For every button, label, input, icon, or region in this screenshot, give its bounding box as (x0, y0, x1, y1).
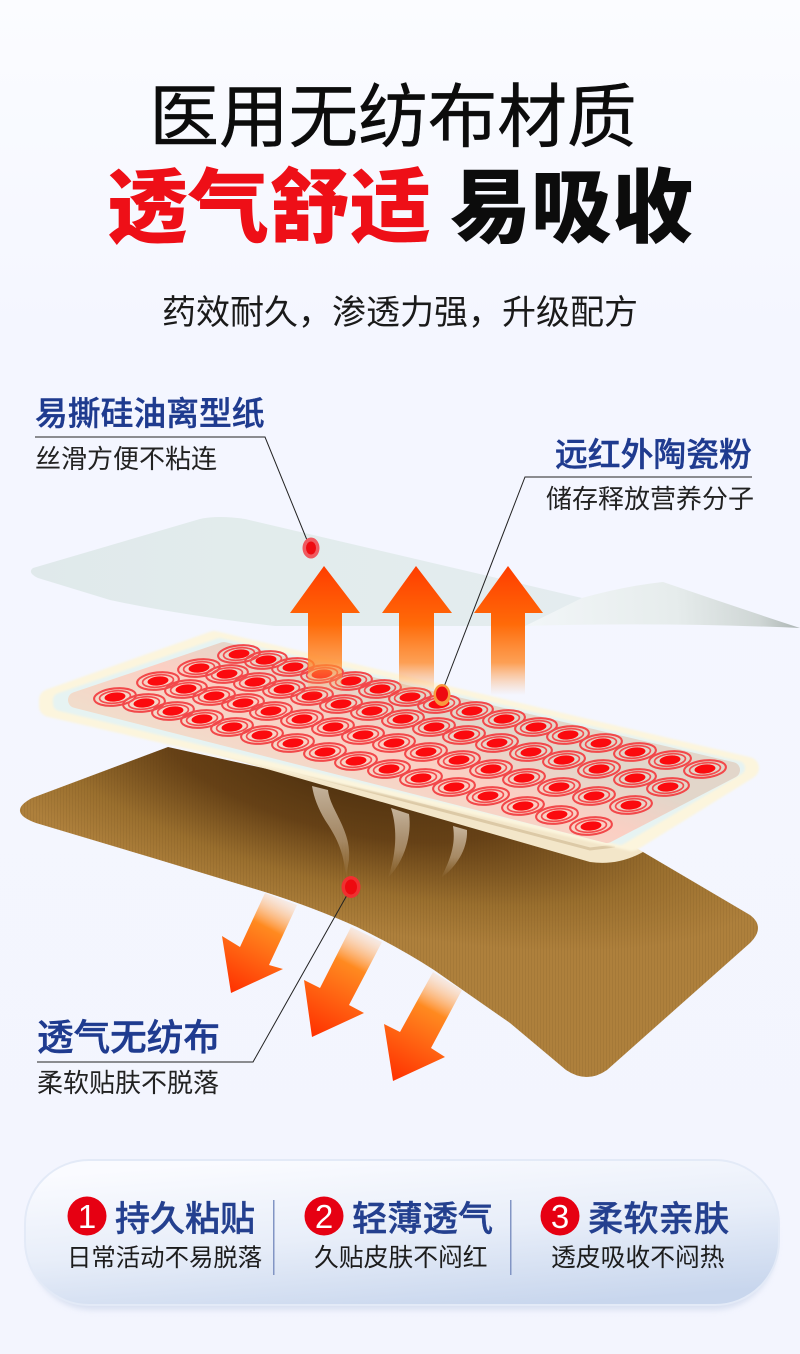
patch underside (170, 730, 643, 863)
benefit 2: 2 (315, 1198, 333, 1235)
callout: release paper (35, 395, 320, 558)
divider (510, 1200, 512, 1275)
callout: breathable non-woven: 柔软贴肤不脱落 (37, 1068, 219, 1098)
divider (273, 1200, 274, 1275)
benefit 3: 透皮吸收不闷热 (551, 1244, 725, 1272)
steam wisps (312, 786, 467, 878)
illustration: release paper sheet (31, 517, 800, 628)
subtitle: 药效耐久，渗透力强，升级配方 (162, 294, 638, 332)
headline: breathable and comfortable, easy absorption (107, 164, 693, 254)
panel: three benefits (25, 1160, 779, 1310)
far-infrared ceramic dots grid (93, 643, 727, 837)
headline: breathable and comfortable, easy absorption: 透气舒适 (107, 164, 431, 254)
headline: breathable and comfortable, easy absorption: 易吸收 (450, 164, 693, 254)
patch glow edge (50, 642, 748, 840)
middle patch layer (50, 642, 748, 863)
benefit 3: 3 (551, 1198, 569, 1235)
callout: release paper: 易撕硅油离型纸 (35, 395, 265, 432)
callout: breathable non-woven: 透气无纺布 (37, 1017, 220, 1058)
arrows: downward penetration (222, 893, 462, 1081)
patch body (76, 650, 732, 835)
benefit 2: 久贴皮肤不闷红 (314, 1244, 488, 1272)
benefit 3: 柔软亲肤 (588, 1200, 729, 1239)
benefit 2 (304, 1196, 493, 1272)
title: medical non-woven material: 医用无纺布材质 (149, 78, 637, 156)
benefit 1: 1 (78, 1198, 96, 1235)
benefit 1: 持久粘贴 (115, 1200, 255, 1239)
benefit 3 (540, 1196, 729, 1272)
callout: far-infrared ceramic powder: 储存释放营养分子 (546, 484, 754, 514)
callout: far-infrared ceramic powder: 远红外陶瓷粉 (555, 436, 752, 473)
callout: release paper: 丝滑方便不粘连 (35, 444, 217, 474)
callout: breathable non-woven (37, 876, 360, 1098)
illustration: brown non-woven backing (20, 747, 758, 1077)
arrows: upward heat flow (290, 566, 543, 695)
benefit 1 (67, 1196, 262, 1272)
benefit 1: 日常活动不易脱落 (67, 1245, 262, 1272)
callout: far-infrared ceramic powder (434, 436, 754, 706)
benefit 2: 轻薄透气 (352, 1200, 493, 1239)
